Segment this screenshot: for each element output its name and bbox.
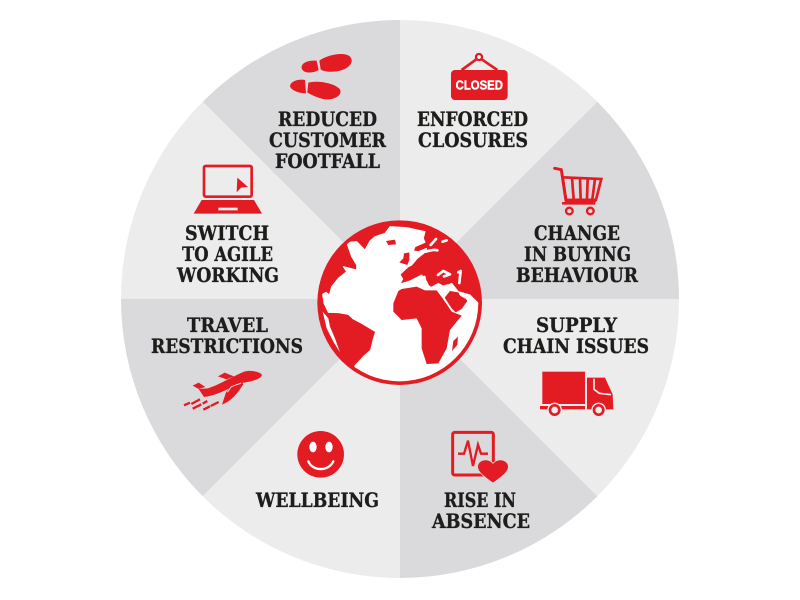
wedge: change in buying behaviour (400, 102, 679, 299)
label: switch to agile working: SWITCH (185, 222, 269, 245)
icon: footprints (290, 54, 352, 99)
madagascar (452, 337, 458, 351)
label: reduced customer footfall: FOOTFALL (275, 150, 380, 173)
label: change in buying behaviour (516, 222, 639, 287)
label: travel restrictions: RESTRICTIONS (151, 335, 303, 358)
pacific strip (323, 312, 340, 352)
panel: rise in absence (400, 299, 597, 578)
label: change in buying behaviour: BEHAVIOUR (516, 264, 639, 287)
label: supply chain issues: CHAIN ISSUES (503, 335, 649, 358)
wedge: reduced customer footfall (203, 20, 400, 299)
circular infographic (121, 20, 679, 578)
label: change in buying behaviour: IN BUYING (524, 243, 631, 266)
label: supply chain issues (503, 314, 649, 358)
icon: airplane (184, 371, 262, 410)
label: rise in absence: ABSENCE (431, 510, 530, 533)
label: supply chain issues: SUPPLY (536, 314, 618, 337)
wedge: switch to agile working (121, 102, 400, 299)
label: enforced closures (417, 108, 528, 152)
label: reduced customer footfall (269, 108, 387, 173)
panel: switch to agile working (121, 102, 400, 299)
label: switch to agile working: WORKING (176, 264, 279, 287)
label: enforced closures: CLOSURES (418, 129, 528, 152)
wedge: rise in absence (400, 299, 597, 578)
icon: delivery truck (540, 372, 613, 417)
label: reduced customer footfall: CUSTOMER (269, 129, 387, 152)
britain (399, 252, 409, 265)
icon: closed sign (451, 54, 508, 100)
wedge: enforced closures (400, 20, 597, 299)
icon: health monitor and heart (453, 432, 508, 483)
inland seas (424, 239, 461, 288)
icon: closed sign: CLOSED (456, 78, 503, 92)
panel: supply chain issues (400, 299, 679, 496)
label: travel restrictions: TRAVEL (187, 314, 268, 337)
label: rise in absence: RISE IN (444, 489, 516, 512)
panel: travel restrictions (121, 299, 400, 496)
icon: laptop (194, 166, 262, 214)
greenland (386, 240, 396, 245)
label: wellbeing: WELLBEING (255, 489, 379, 512)
panel: wellbeing (203, 299, 400, 578)
panel: reduced customer footfall (203, 20, 400, 299)
label: reduced customer footfall: REDUCED (278, 108, 377, 131)
label: switch to agile working: TO AGILE (182, 243, 273, 266)
arabia (445, 291, 467, 312)
icon: shopping cart (555, 168, 601, 214)
panel: change in buying behaviour (400, 102, 679, 299)
wedge: wellbeing (203, 299, 400, 578)
label: travel restrictions (151, 314, 303, 358)
panel: enforced closures (400, 20, 597, 299)
label: enforced closures: ENFORCED (417, 108, 528, 131)
icon: smiley face (297, 431, 344, 478)
africa (393, 287, 462, 364)
label: switch to agile working (176, 222, 279, 287)
ocean (322, 226, 478, 382)
icon: globe (317, 220, 487, 392)
label: rise in absence (431, 489, 530, 533)
label: change in buying behaviour: CHANGE (534, 222, 620, 245)
wedge: travel restrictions (121, 299, 400, 496)
wedge: supply chain issues (400, 299, 679, 496)
